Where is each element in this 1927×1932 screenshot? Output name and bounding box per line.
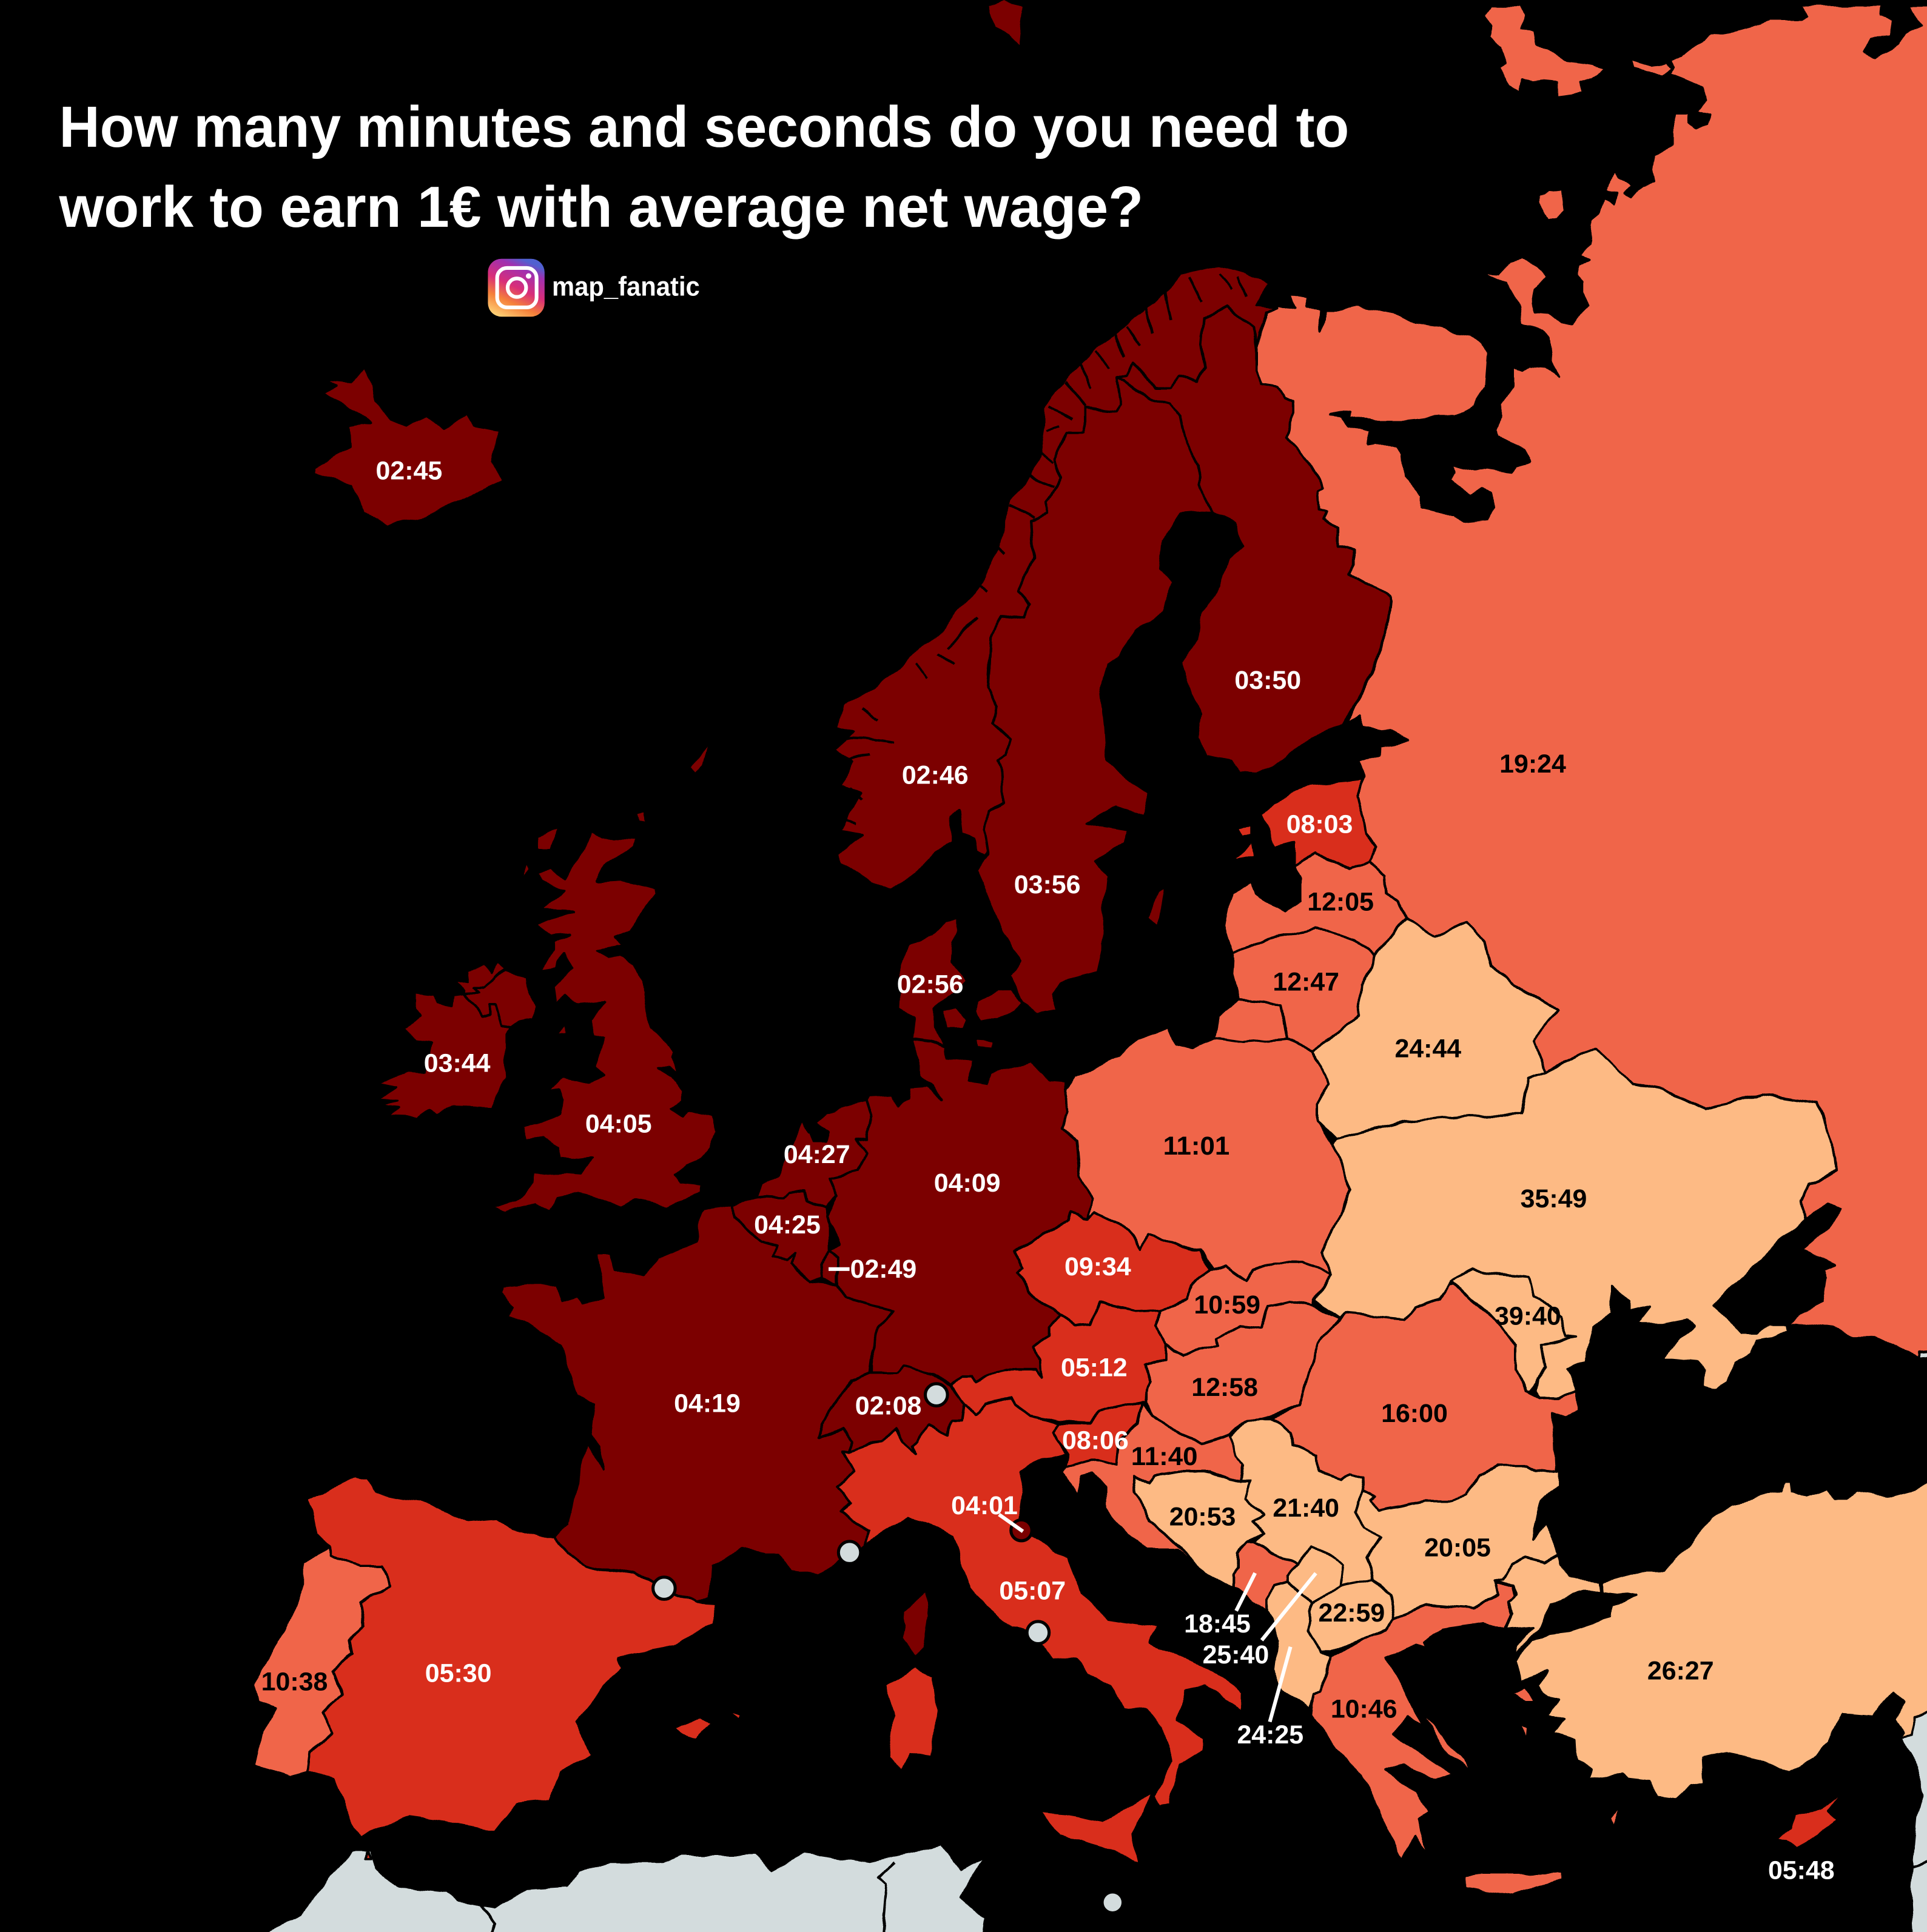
label: Finland: 03:50 <box>1234 666 1301 695</box>
dot: Vatican <box>1027 1622 1049 1644</box>
Sweden: Gotland <box>1146 887 1166 928</box>
country: Cyprus <box>1774 1789 1846 1848</box>
author handle: map_fanatic <box>552 272 700 302</box>
label: Belarus: 24:44 <box>1394 1034 1461 1063</box>
label: Austria: 05:12 <box>1061 1353 1128 1383</box>
leader: Luxembourg <box>830 1268 848 1270</box>
label: Sweden: 03:56 <box>1014 870 1080 899</box>
country: Great Britain <box>492 829 717 1213</box>
Faroe islands <box>690 743 708 774</box>
label: Romania: 16:00 <box>1381 1399 1448 1428</box>
label: Lithuania: 12:47 <box>1273 968 1339 997</box>
country: Turkey, European part <box>1495 1555 1602 1655</box>
country: Serbia <box>1229 1418 1381 1586</box>
country: Finland <box>1116 306 1391 774</box>
country: Switzerland <box>818 1365 963 1454</box>
icon: Instagram logo <box>488 259 545 317</box>
label: France: 04:19 <box>674 1389 741 1418</box>
label: Serbia: 21:40 <box>1273 1494 1339 1523</box>
Denmark: islands <box>943 990 1023 1048</box>
country: Belgium <box>732 1192 830 1281</box>
dot: San Marino <box>1011 1520 1032 1541</box>
label: Russia: 19:24 <box>1499 750 1566 779</box>
country: Ireland <box>377 962 513 1119</box>
Greece: Crete and islands <box>1464 1688 1621 1895</box>
label: Switzerland: 02:08 <box>855 1392 921 1421</box>
label: Estonia: 08:03 <box>1286 810 1353 839</box>
country: Montenegro <box>1233 1544 1297 1611</box>
country: Norway <box>835 265 1277 892</box>
France: Corsica <box>902 1589 929 1660</box>
border lines in North Africa <box>482 1860 1927 1932</box>
label: Germany: 04:09 <box>934 1169 1000 1198</box>
Russia: peninsula near Kanin <box>1630 61 1673 76</box>
label: Norway: 02:46 <box>902 760 969 790</box>
country: Denmark <box>898 918 967 1047</box>
non-data land: Middle East <box>1901 1709 1927 1932</box>
Italy: Sicily <box>1038 1793 1152 1863</box>
leader: San Marino <box>1000 1515 1021 1531</box>
label: Portugal: 10:38 <box>261 1668 328 1697</box>
title <box>59 95 1349 240</box>
label: Italy: 05:07 <box>999 1576 1066 1605</box>
dot: Malta <box>1102 1892 1123 1913</box>
UK islands <box>521 810 647 1034</box>
Norway: fjords <box>835 273 1247 823</box>
Svalbard fragment <box>988 0 1025 47</box>
label: San Marino: 04:01 <box>951 1491 1018 1520</box>
leader: Albania <box>1270 1649 1290 1720</box>
title: How many minutes and seconds do you need to <box>59 95 1349 159</box>
label: Latvia: 12:05 <box>1307 888 1374 917</box>
label: Belgium: 04:25 <box>754 1210 821 1239</box>
label: Ukraine: 35:49 <box>1521 1184 1587 1213</box>
dot: Monaco <box>838 1541 861 1563</box>
label: Ireland: 03:44 <box>424 1049 491 1078</box>
country: Ukraine <box>1314 1047 1837 1398</box>
Russia: northern bay <box>1864 5 1921 58</box>
country: Luxembourg <box>821 1252 840 1284</box>
country: Lithuania <box>1232 928 1376 1050</box>
label: Greece: 10:46 <box>1331 1694 1397 1723</box>
label: Hungary: 12:58 <box>1191 1373 1258 1402</box>
country: Latvia <box>1225 853 1406 955</box>
country: Greece <box>1311 1585 1516 1860</box>
Russia: Novaya Zemlya coast <box>1484 6 1607 96</box>
label: North Macedonia: 22:59 <box>1319 1598 1385 1628</box>
country: Sweden <box>976 378 1212 1014</box>
non-data land: North Africa <box>252 1843 986 1932</box>
Russia: Kolguev island <box>1538 189 1565 220</box>
grey Georgia corner <box>1919 1350 1927 1358</box>
country: Croatia <box>1062 1401 1243 1572</box>
value labels <box>261 456 1835 1885</box>
dot: Andorra <box>653 1577 675 1599</box>
leader: Kosovo <box>1263 1575 1314 1639</box>
label: Croatia: 11:40 <box>1131 1442 1197 1471</box>
leader lines <box>830 1269 1314 1720</box>
Spain: Balearic islands <box>365 1710 742 1859</box>
country: Moldova <box>1451 1269 1577 1392</box>
country: Northern Ireland <box>466 971 536 1028</box>
country: Czechia <box>1015 1212 1209 1324</box>
country: Belarus <box>1312 919 1559 1139</box>
label: Kosovo: 25:40 <box>1203 1640 1269 1669</box>
country: Austria <box>951 1304 1166 1423</box>
label: Poland: 11:01 <box>1163 1132 1229 1161</box>
label: Montenegro: 18:45 <box>1184 1609 1251 1639</box>
country: France <box>499 1204 893 1603</box>
label: Luxembourg: 02:49 <box>850 1255 916 1284</box>
Greece: Evia <box>1417 1706 1472 1774</box>
country: Germany <box>828 1039 1092 1386</box>
label: Denmark: 02:56 <box>897 970 964 999</box>
country: Iceland <box>314 367 503 526</box>
label: Bulgaria: 20:05 <box>1424 1533 1491 1562</box>
label: Moldova: 39:40 <box>1495 1301 1561 1330</box>
country: Hungary <box>1145 1301 1339 1443</box>
country: Bulgaria <box>1355 1465 1560 1619</box>
label: Slovakia: 10:59 <box>1194 1290 1260 1320</box>
label: Spain: 05:30 <box>425 1659 492 1688</box>
country: Kosovo <box>1288 1545 1343 1603</box>
Estonia: islands <box>1231 825 1254 861</box>
label: Bosnia and Herzegovina: 20:53 <box>1169 1502 1236 1531</box>
country: Spain <box>307 1476 718 1839</box>
label: Cyprus: 05:48 <box>1768 1856 1835 1885</box>
country: Bosnia and Herzegovina <box>1134 1472 1264 1588</box>
label: Iceland: 02:45 <box>376 456 442 485</box>
label: Netherlands: 04:27 <box>784 1140 850 1169</box>
Netherlands: IJsselmeer <box>807 1119 828 1141</box>
dot: Liechtenstein <box>926 1384 947 1406</box>
label: Czechia: 09:34 <box>1064 1252 1131 1281</box>
country: Estonia <box>1260 776 1376 870</box>
label: Slovenia: 08:06 <box>1062 1426 1129 1455</box>
country: Turkey, Asian part <box>1518 1477 1927 1799</box>
country: North Macedonia <box>1308 1578 1393 1652</box>
label: United Kingdom: 04:05 <box>585 1109 652 1138</box>
country: Poland <box>1061 1028 1351 1280</box>
title: work to earn 1€ with average net wage? <box>59 175 1143 240</box>
country: Slovenia <box>1054 1401 1142 1467</box>
country: Russia <box>1257 5 1927 1358</box>
country: Slovakia <box>1154 1263 1331 1354</box>
country: Albania <box>1266 1582 1331 1710</box>
country: Netherlands <box>756 1100 871 1207</box>
label: Albania: 24:25 <box>1237 1720 1303 1749</box>
country: Portugal <box>252 1545 391 1777</box>
Aegean islands and inlets <box>1386 1645 1466 1706</box>
country: Romania <box>1271 1284 1577 1511</box>
country: Italy <box>836 1397 1243 1806</box>
microstate dots <box>653 1384 1123 1913</box>
leader: Montenegro <box>1237 1575 1254 1609</box>
label: Turkey: 26:27 <box>1647 1656 1714 1685</box>
Italy: Sardinia <box>883 1667 938 1772</box>
Russia: Kaliningrad <box>1205 1001 1288 1042</box>
